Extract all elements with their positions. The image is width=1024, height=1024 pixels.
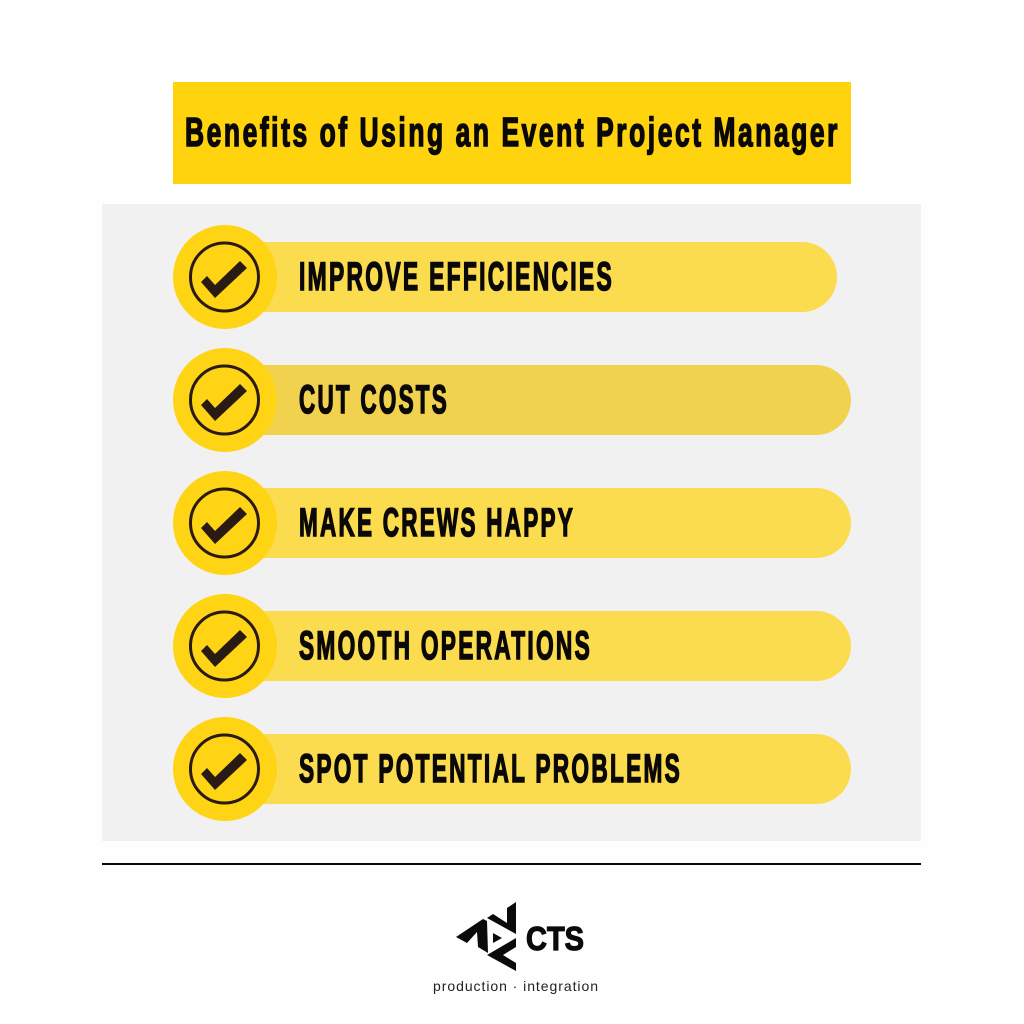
benefit: make crews happy (173, 471, 851, 575)
benefit: cut costs: CUT COSTS (299, 378, 449, 422)
panel: benefits list (102, 204, 921, 841)
logo tagline: production · integration (433, 978, 598, 994)
logo wordmark: CTS (526, 920, 584, 957)
benefit: improve efficiencies (173, 225, 837, 329)
icon: CTS triangle mark (456, 902, 516, 971)
benefit: improve efficiencies: IMPROVE EFFICIENCIES (299, 255, 614, 299)
benefit: smooth operations (173, 594, 851, 698)
benefit: spot potential problems: SPOT POTENTIAL PROBLEMS (299, 747, 682, 791)
title (173, 82, 851, 184)
logo: CTS (433, 902, 598, 994)
benefit: spot potential problems (173, 717, 851, 821)
benefit: make crews happy: MAKE CREWS HAPPY (299, 501, 575, 545)
benefit: smooth operations: SMOOTH OPERATIONS (299, 624, 592, 668)
benefit: cut costs (173, 348, 851, 452)
